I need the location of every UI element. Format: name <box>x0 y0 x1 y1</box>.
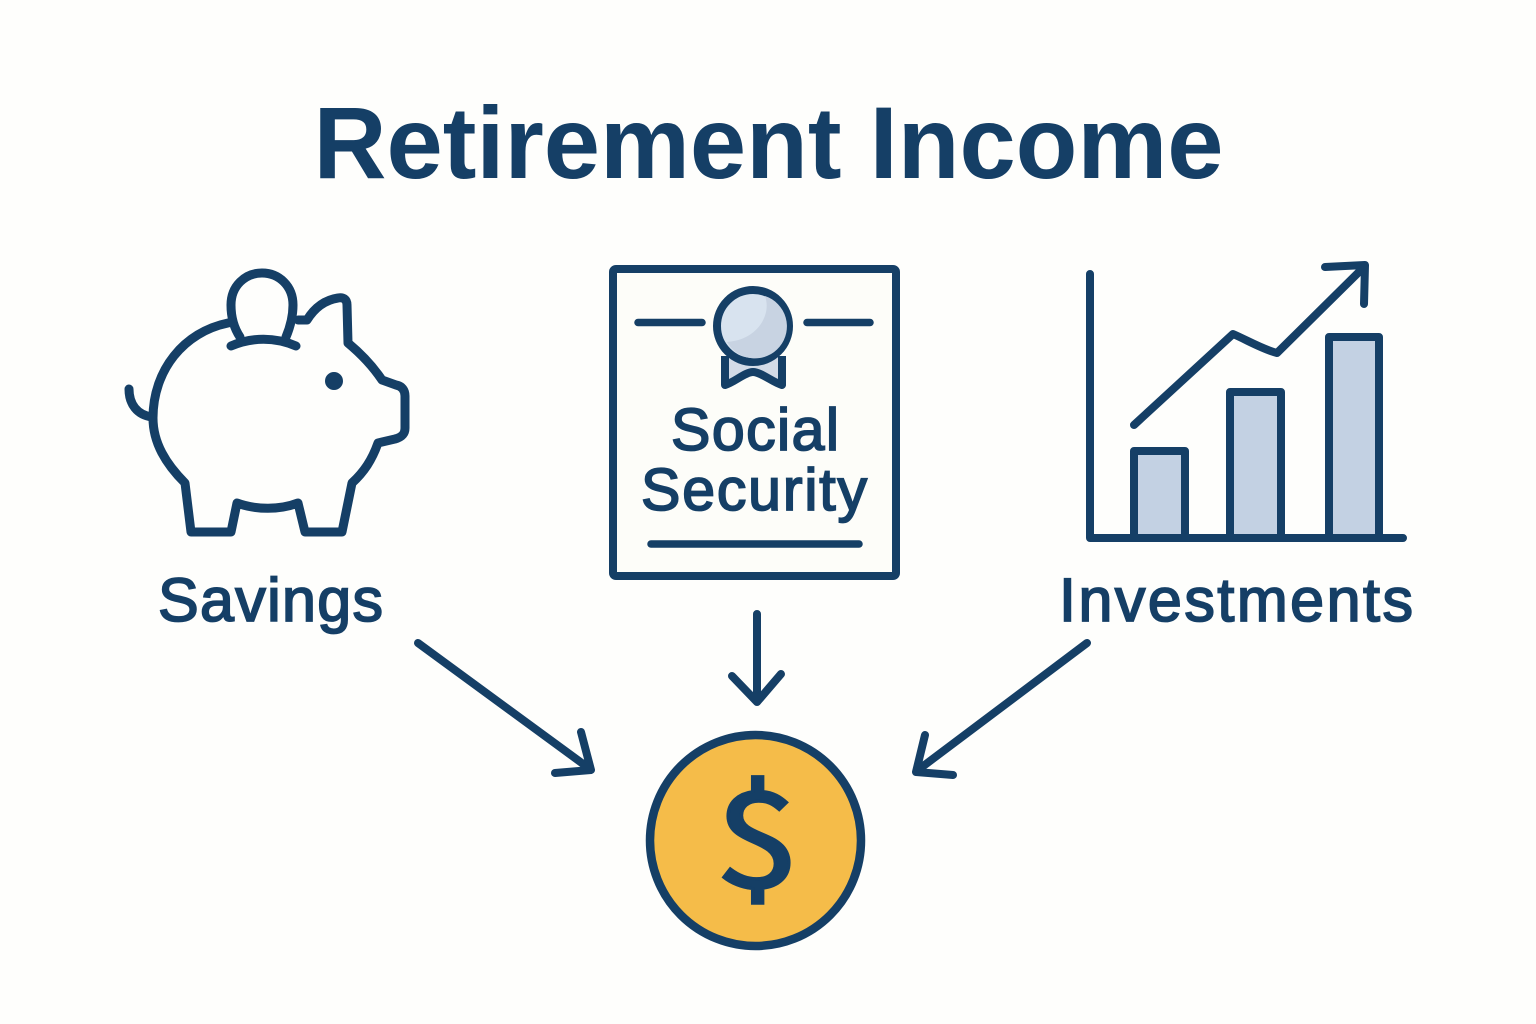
card text: Social <box>671 397 839 463</box>
arrow: social security to income <box>732 614 781 702</box>
axes <box>1090 274 1403 538</box>
chart: investments <box>1090 265 1403 538</box>
bar 3 <box>1329 337 1379 538</box>
bar 1 <box>1134 451 1185 538</box>
panel: social security card <box>613 269 896 576</box>
card text: Security <box>641 457 868 523</box>
arrow: investments to income <box>916 643 1087 775</box>
icon: dollar coin <box>650 735 861 946</box>
card text <box>641 397 868 523</box>
bar 2 <box>1230 392 1281 538</box>
trend arrow <box>1134 265 1365 425</box>
title: Retirement Income <box>314 86 1224 200</box>
label: Investments: Investments <box>1059 566 1413 634</box>
icon: dollar coin: $ <box>715 735 799 926</box>
arrow: savings to income <box>418 643 591 773</box>
label: Savings: Savings <box>158 566 383 634</box>
icon: piggy bank <box>129 273 405 532</box>
icon: medal <box>717 290 789 385</box>
